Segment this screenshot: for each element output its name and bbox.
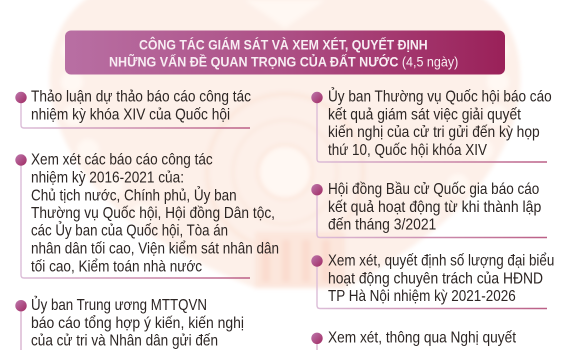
item: ủy ban thường vụ quốc hội báo cáo: kiến nghị của cử tri gửi đến kỳ họp [328,124,540,141]
item: thảo luận dự thảo báo cáo: Thảo luận dự thảo báo cáo công tác [31,88,251,106]
item: hội đồng bầu cử quốc gia: đến tháng 3/2021 [328,216,436,233]
item: ủy ban trung ương MTTQVN: báo cáo tổng hợp ý kiến, kiến nghị [31,314,244,332]
item: xem xét các báo cáo công tác: Xem xét các báo cáo công tác [31,152,213,169]
item: ủy ban thường vụ quốc hội báo cáo: thứ 10, Quốc hội khóa XIV [328,142,488,159]
header line 1: CÔNG TÁC GIÁM SÁT VÀ XEM XÉT, QUYẾT ĐỊNH [139,35,428,52]
item: ủy ban trung ương MTTQVN: của cử tri và Nhân dân gửi đến [31,333,218,350]
item: xem xét các báo cáo công tác: nhiệm kỳ 2016-2021 của: [31,170,184,186]
item: ủy ban thường vụ quốc hội báo cáo [311,87,552,162]
item: thảo luận dự thảo báo cáo [15,88,251,128]
item: xem xét các báo cáo công tác: Thường vụ Quốc hội, Hội đồng Dân tộc, [31,205,275,222]
item: xem xét các báo cáo công tác: nhân dân tối cao, Viện kiểm sát nhân dân [31,239,279,257]
header line 2: NHỮNG VẤN ĐỀ QUAN TRỌNG CỦA ĐẤT NƯỚC (4,5 ngày) [109,53,458,70]
item: xem xét thông qua nghị quyết: Xem xét, thông qua Nghị quyết [328,330,517,347]
item: hội đồng bầu cử quốc gia: Hội đồng Bầu cử Quốc gia báo cáo [328,181,540,198]
item: xem xét thông qua nghị quyết [311,330,517,350]
background emblem [50,0,520,288]
item: ủy ban thường vụ quốc hội báo cáo: kết quả giám sát việc giải quyết [328,106,522,123]
item: xem xét các báo cáo công tác: các Ủy ban của Quốc hội, Tòa án [31,221,228,240]
item: xem xét các báo cáo công tác: Chủ tịch nước, Chính phủ, Ủy ban [31,185,237,204]
item: ủy ban trung ương MTTQVN: Ủy ban Trung ương MTTQVN [31,295,207,314]
item: thảo luận dự thảo báo cáo: nhiệm kỳ khóa XIV của Quốc hội [31,106,230,123]
item: số lượng đại biểu HĐND: hoạt động chuyên trách của HĐND [328,270,543,287]
item: xem xét các báo cáo công tác [15,152,279,278]
header banner [65,30,505,74]
item: số lượng đại biểu HĐND [311,252,554,308]
item: số lượng đại biểu HĐND: TP Hà Nội nhiệm kỳ 2021-2026 [328,288,516,305]
item: hội đồng bầu cử quốc gia [311,181,547,238]
item: ủy ban trung ương MTTQVN [15,295,244,350]
item: xem xét các báo cáo công tác: tối cao, Kiểm toán nhà nước [31,257,202,275]
item: hội đồng bầu cử quốc gia: kết quả hoạt động từ khi thành lập [328,199,542,216]
